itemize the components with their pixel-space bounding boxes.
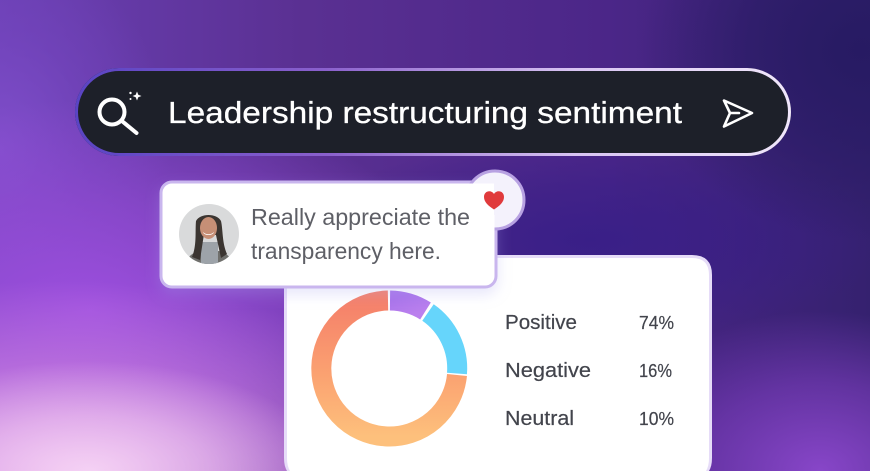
icon: magnifier with sparkles (100, 92, 142, 133)
legend: positive: Positive (505, 312, 577, 334)
heart reaction bubble (440, 171, 524, 245)
icon: heart (484, 191, 504, 210)
legend: neutral (505, 408, 674, 430)
legend: negative (505, 360, 672, 382)
comment text: transparency here. (251, 238, 441, 264)
legend: positive (505, 312, 674, 334)
legend: negative: 16% (639, 361, 672, 381)
legend: neutral: Neutral (505, 408, 574, 430)
icon: send arrow (724, 100, 752, 126)
donut chart (321, 300, 457, 436)
legend: neutral: 10% (639, 409, 674, 429)
panel: comment bubble (161, 171, 524, 287)
legend: negative: Negative (505, 360, 591, 382)
comment text: Really appreciate the (251, 204, 470, 230)
comment text (251, 204, 470, 264)
panel: sentiment results card (284, 255, 712, 471)
search bar (75, 68, 791, 156)
search query text: Leadership restructuring sentiment (168, 95, 682, 130)
legend: positive: 74% (639, 313, 674, 333)
avatar photo (179, 204, 239, 264)
